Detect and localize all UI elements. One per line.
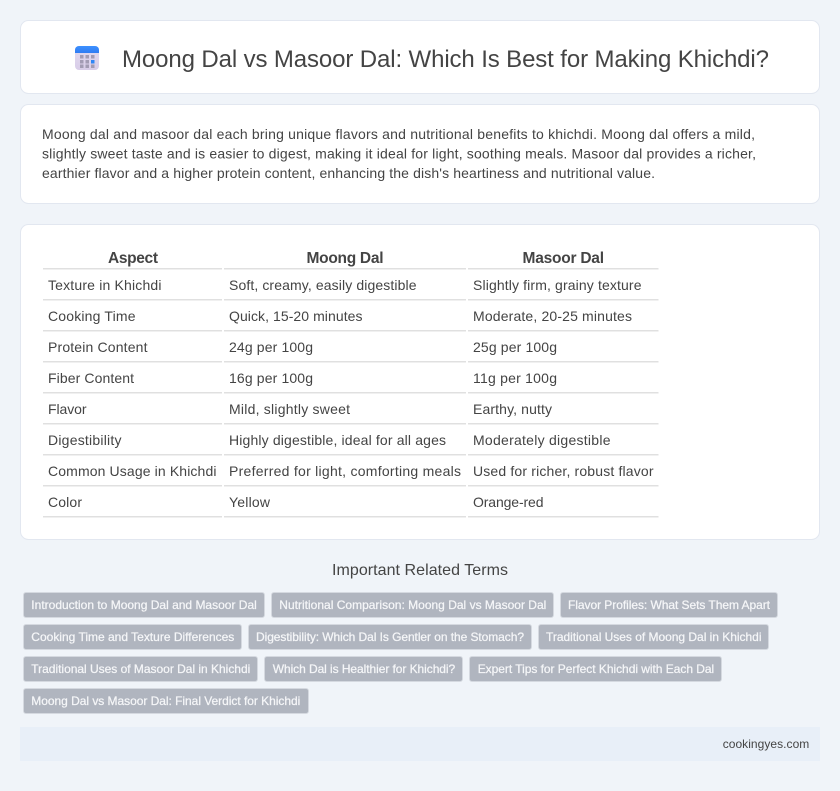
tag: Nutritional Comparison: Moong Dal vs Masoor Dal: [279, 598, 546, 612]
table row: color: [43, 494, 658, 518]
tag: [272, 592, 554, 618]
heading: important related terms: Important Related Terms: [332, 562, 508, 579]
table row: fiber: [43, 370, 658, 394]
table row: flavor: Flavor: [48, 401, 87, 417]
table row: texture: Soft, creamy, easily digestible: [229, 277, 417, 293]
table row: cooking time: Quick, 15-20 minutes: [229, 308, 362, 324]
panel: title header: [20, 20, 820, 94]
table row: common usage: [43, 463, 658, 486]
tag: [264, 656, 462, 682]
table row: color: Yellow: [229, 494, 271, 510]
table row: protein: 24g per 100g: [229, 339, 313, 355]
tag: [248, 624, 532, 650]
table row: texture: Slightly firm, grainy texture: [473, 277, 642, 293]
tag: [538, 624, 768, 650]
footer: [20, 727, 820, 761]
table row: color: Color: [48, 494, 82, 510]
table row: flavor: [43, 401, 658, 424]
panel: introduction: [20, 104, 820, 204]
table row: digestibility: [43, 432, 658, 456]
tag: [470, 656, 722, 682]
tag: Expert Tips for Perfect Khichdi with Each Dal: [478, 662, 714, 676]
table row: common usage: Preferred for light, comforting meals: [229, 463, 461, 479]
panel: comparison table: [20, 224, 820, 540]
table row: cooking time: Moderate, 20-25 minutes: [473, 308, 632, 324]
table header row: [43, 250, 658, 270]
tag: Which Dal is Healthier for Khichdi?: [273, 662, 456, 676]
tag: Traditional Uses of Moong Dal in Khichdi: [546, 630, 762, 644]
table header row: Masoor Dal: [522, 250, 604, 267]
table row: digestibility: Highly digestible, ideal for all ages: [229, 432, 446, 448]
table row: texture: [43, 277, 658, 300]
tag: Introduction to Moong Dal and Masoor Dal: [31, 598, 257, 612]
table header row: Aspect: [108, 250, 158, 267]
tag: Traditional Uses of Masoor Dal in Khichdi: [31, 662, 250, 676]
text block: introduction paragraph: earthier flavor and a higher protein content, enhancing the dish's heartiness and nutritional value.: [42, 165, 655, 181]
tag: Moong Dal vs Masoor Dal: Final Verdict for Khichdi: [31, 694, 300, 708]
table row: digestibility: Digestibility: [48, 432, 122, 448]
text block: introduction paragraph: [42, 126, 756, 181]
table row: fiber: Fiber Content: [48, 370, 134, 386]
table row: digestibility: Moderately digestible: [473, 432, 611, 448]
tag: Cooking Time and Texture Differences: [31, 630, 234, 644]
tag: [560, 592, 778, 618]
tag: [24, 624, 242, 650]
panel: related term tags: [24, 592, 778, 714]
footer: cookingyes.com: [723, 737, 809, 751]
tag: [24, 656, 258, 682]
table row: protein: [43, 339, 658, 362]
tag: Digestibility: Which Dal Is Gentler on the Stomach?: [256, 630, 524, 644]
table row: common usage: Used for richer, robust flavor: [473, 463, 654, 479]
table row: fiber: 11g per 100g: [473, 370, 557, 386]
table row: cooking time: Cooking Time: [48, 308, 136, 324]
text block: introduction paragraph: slightly sweet taste and is easier to digest, making it ideal for light, soothing meals. Masoor dal provides a richer,: [42, 146, 756, 162]
tag: [24, 592, 264, 618]
table row: common usage: Common Usage in Khichdi: [48, 463, 216, 479]
table row: cooking time: [43, 308, 658, 332]
table row: flavor: Mild, slightly sweet: [229, 401, 350, 417]
table row: fiber: 16g per 100g: [229, 370, 313, 386]
title: Moong Dal vs Masoor Dal: Which Is Best for Making Khichdi?: [122, 46, 769, 73]
text block: introduction paragraph: Moong dal and masoor dal each bring unique flavors and nutritional benefits to khichdi. Moong dal offers a mild,: [42, 126, 755, 142]
tag: [24, 688, 308, 714]
table header row: Moong Dal: [306, 250, 384, 267]
table row: protein: 25g per 100g: [473, 339, 557, 355]
icon: calendar: [75, 46, 99, 70]
table row: color: Orange-red: [473, 494, 544, 510]
table row: flavor: Earthy, nutty: [473, 401, 552, 417]
table row: protein: Protein Content: [48, 339, 148, 355]
table row: texture: Texture in Khichdi: [48, 277, 162, 293]
tag: Flavor Profiles: What Sets Them Apart: [568, 598, 771, 612]
